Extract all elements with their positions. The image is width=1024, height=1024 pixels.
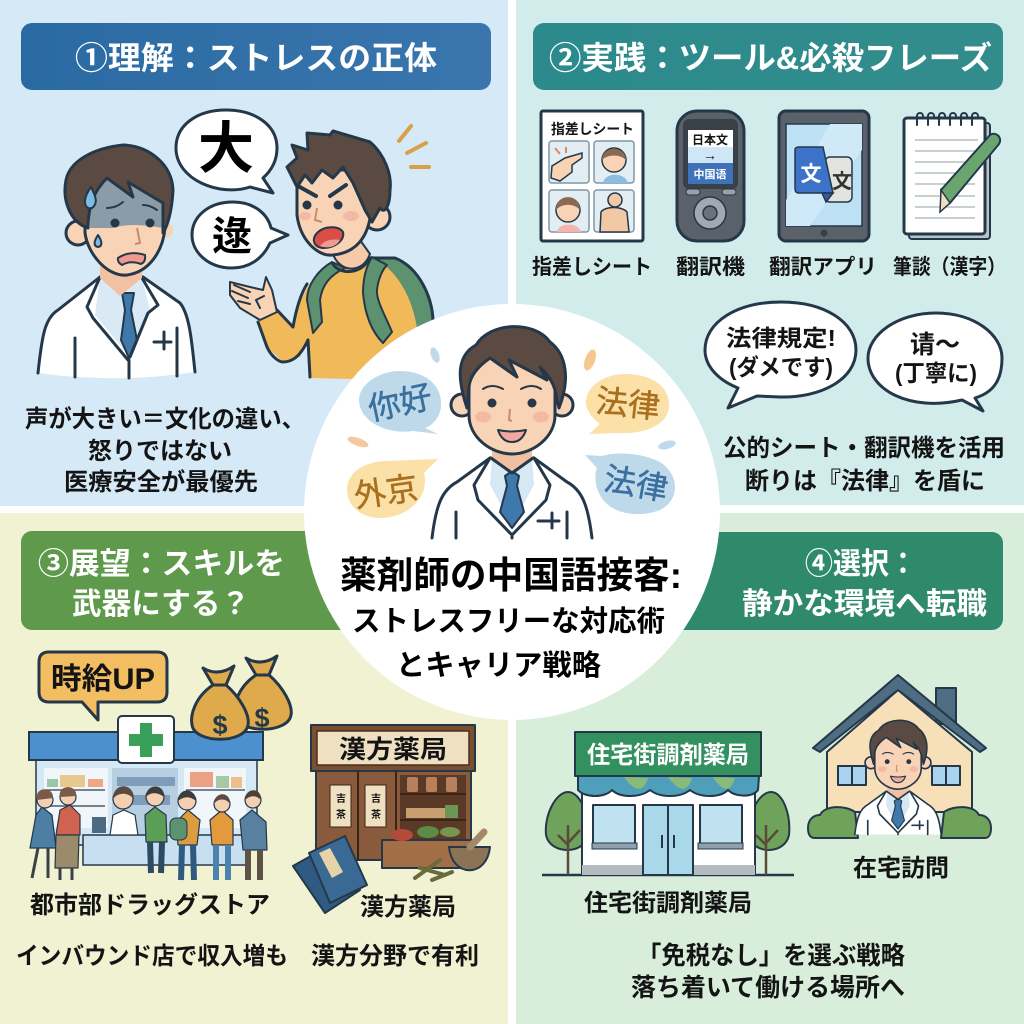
icon: translator device [677,111,744,241]
illustration: kampo pharmacy: 茶 [371,808,381,821]
bubble: 你好 [359,346,441,434]
speech bubble: 法律規定: 法律規定! [726,325,836,351]
text: panel 1 body: 怒りではない [88,438,232,465]
icon: pointing sheet: 指差しシート [551,121,634,137]
illustration: home visit [808,675,991,838]
icon: money bags [192,656,291,740]
icon: books [293,836,367,913]
heading: panel 1 [21,23,491,90]
icon: 時給UP bubble [39,652,167,720]
labels: store types: 都市部ドラッグストア [30,891,270,919]
speech bubble: 大: 大 [198,117,254,180]
speech bubble: 大 [176,110,277,193]
text: panel 2 body: 断りは『法律』を盾に [745,468,985,495]
heading: panel 4 [650,532,1003,630]
labels: tools [532,256,1006,279]
illustration: residential pharmacy: 住宅街調剤薬局 [587,742,749,769]
speech bubble: 法律規定: (ダメです) [729,354,833,380]
labels: tools: 筆談（漢字） [893,256,1006,279]
text: panel 1 body [25,405,305,496]
labels: tools: 指差しシート [532,256,652,279]
labels: tools: 翻訳アプリ [769,256,877,279]
icon: translator device: → [703,147,717,163]
heading: panel 4: ④選択： [805,548,917,581]
icon: notepad and pen [904,113,1000,239]
text: panel 4 body: 落ち着いて働ける場所へ [631,974,905,1002]
heading: panel 2: ②実践：ツール&必殺フレーズ [549,40,992,76]
illustration: kampo pharmacy: 茶 [336,808,346,821]
speech bubble: 请 [868,313,1002,411]
heading: panel 2 [533,23,1003,90]
icon: translation app tablet: 文 [832,170,852,193]
illustration: residential pharmacy [542,732,794,875]
illustration: central pharmacist [432,327,592,538]
icon: translation app tablet: 文 [800,163,822,186]
icon: money bags: $ [212,710,228,740]
speech bubble: 逯 [192,202,288,268]
speech bubble: 法律規定 [705,302,856,408]
bubble: 外京: 外京 [352,470,420,514]
center circle [304,304,720,720]
illustration: kampo pharmacy: 吉 [336,792,346,805]
labels: tools: 翻訳機 [676,256,745,279]
labels: quiet workplaces [584,855,949,917]
icon: translation app tablet [779,111,869,241]
illustration: worried pharmacist [38,145,195,378]
speech bubble: 请: 请～ [910,331,960,359]
text: panel 3 body: インバウンド店で収入増も [16,943,288,970]
illustration: urban drugstore [29,716,267,880]
icon: translator device: 中国语 [694,167,726,181]
icon: money bags: $ [254,703,270,733]
speech bubble: 逯: 逯 [212,215,252,259]
text: panel 2 body: 公的シート・翻訳機を活用 [723,435,1005,462]
center title: 薬剤師の中国語接客: [340,555,682,596]
illustration: loud customer [230,126,433,380]
center title: ストレスフリーな対応術 [352,605,665,638]
illustration: kampo pharmacy: 漢方薬局 [339,736,447,764]
speech bubble: 请: (丁寧に) [895,360,977,386]
heading: panel 3: 武器にする？ [72,588,250,621]
heading: panel 3 [21,531,381,630]
labels: store types [30,891,456,921]
icon: translator device: 日本文 [692,132,728,147]
text: panel 3 body [16,943,479,970]
bubble: 外京 [346,434,438,518]
text: panel 1 body: 医療安全が最優先 [64,468,258,496]
icon: pointing sheet [541,111,643,241]
center title [340,555,682,682]
bubble: 法律 (orange): 法律 [594,383,662,425]
heading: panel 1: ①理解：ストレスの正体 [75,40,437,76]
labels: quiet workplaces: 在宅訪問 [853,855,949,882]
text: panel 4 body: 「免税なし」を選ぶ戦略 [637,942,905,970]
bubble: 你好: 你好 [365,379,435,427]
text: panel 3 body: 漢方分野で有利 [311,943,479,970]
heading: panel 3: ③展望：スキルを [38,548,285,581]
heading: panel 4: 静かな環境へ転職 [742,588,987,621]
center title: とキャリア戦略 [396,649,601,682]
bubble: 法律 (blue) [585,439,677,514]
text: panel 4 body [631,942,905,1002]
icon: 時給UP bubble: 時給UP [51,663,155,696]
bubble: 法律 (blue): 法律 [601,461,671,507]
labels: store types: 漢方薬局 [360,894,456,921]
labels: quiet workplaces: 住宅街調剤薬局 [584,890,752,917]
illustration: kampo pharmacy: 吉 [371,792,381,805]
bubble: 法律 (orange) [582,348,669,434]
illustration: kampo pharmacy [311,725,490,880]
text: panel 2 body [723,435,1005,495]
text: panel 1 body: 声が大きい＝文化の違い、 [25,405,305,433]
